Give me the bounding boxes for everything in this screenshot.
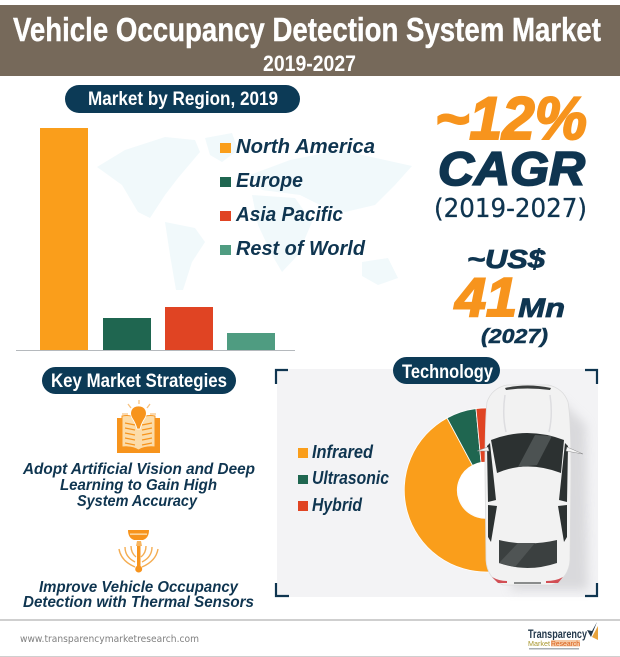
stat: CAGR xyxy=(434,85,587,224)
legend: technology: Hybrid xyxy=(312,495,363,515)
subtitle: 2019-2027 xyxy=(263,51,356,76)
text: strategy one xyxy=(22,461,255,510)
stat: CAGR: CAGR xyxy=(438,142,585,195)
bar: North America xyxy=(40,128,88,350)
stat: market value: 41 xyxy=(454,266,517,328)
legend: technology xyxy=(298,442,389,515)
panel: technology xyxy=(276,369,598,597)
heading: market by region: Market by Region, 2019 xyxy=(88,89,278,110)
text: strategy one: System Accuracy xyxy=(77,493,198,510)
stat: market value: (2027) xyxy=(481,326,548,348)
stat: CAGR: (2019-2027) xyxy=(434,194,587,224)
tail lights xyxy=(492,577,563,583)
stat: market value: Mn xyxy=(518,293,565,323)
icon: book with light bulb xyxy=(117,400,160,453)
legend: regions: Rest of World xyxy=(236,238,366,260)
text: strategy two: Detection with Thermal Sensors xyxy=(23,594,254,611)
legend: regions xyxy=(220,136,375,260)
legend: regions: Europe xyxy=(236,170,303,192)
legend: regions: North America xyxy=(236,136,375,158)
footer xyxy=(0,619,620,657)
rear window xyxy=(499,540,557,568)
donut chart xyxy=(404,408,514,572)
legend: technology: Infrared xyxy=(312,442,374,462)
stat: market value: ~US$ xyxy=(467,244,546,274)
text: strategy one: Adopt Artificial Vision and Deep xyxy=(22,461,255,478)
stat: CAGR: ~12% xyxy=(435,85,587,152)
logo: Market xyxy=(528,639,551,648)
corner brackets xyxy=(276,370,597,596)
bar: Europe xyxy=(103,318,151,350)
heading: technology xyxy=(393,357,500,384)
text: strategy two: Improve Vehicle Occupancy xyxy=(39,579,239,596)
heading: key market strategies: Key Market Strategies xyxy=(51,371,227,392)
logo: Research xyxy=(551,639,580,648)
website url: www.transparencymarketresearch.com xyxy=(20,634,199,645)
car xyxy=(477,385,588,590)
heading: technology: Technology xyxy=(402,362,493,383)
bar: Rest of World xyxy=(227,333,275,350)
logo xyxy=(528,622,598,650)
stat: market value xyxy=(454,244,565,348)
mirrors xyxy=(477,447,583,454)
text: strategy one: Learning to Gain High xyxy=(60,477,217,494)
logo: Transparency xyxy=(528,627,587,641)
bar: Asia Pacific xyxy=(165,307,213,350)
heading: market by region xyxy=(65,85,300,113)
windshield xyxy=(491,433,564,473)
bar chart: market by region xyxy=(16,128,295,351)
icon: thermal sensor xyxy=(119,530,158,572)
world map background xyxy=(97,133,412,290)
side windows xyxy=(487,443,568,542)
legend: technology: Ultrasonic xyxy=(312,468,389,488)
legend: regions: Asia Pacific xyxy=(235,204,343,226)
title banner xyxy=(0,5,620,76)
text: strategy two xyxy=(23,579,254,611)
